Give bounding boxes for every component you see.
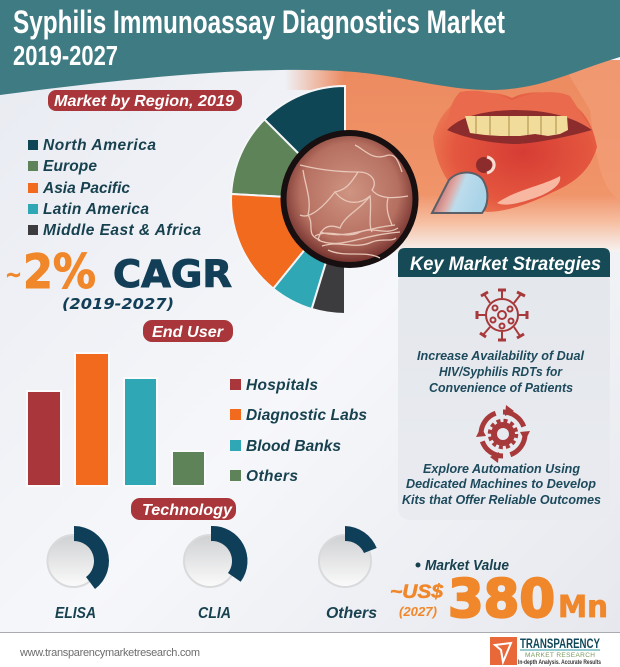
text: strategy two bbox=[402, 461, 601, 507]
text: strategy two: Explore Automation Using bbox=[423, 461, 580, 476]
panel: market by region bbox=[28, 86, 416, 314]
title: 2019-2027 bbox=[13, 40, 118, 71]
panel: end user bbox=[27, 320, 367, 486]
legend: regions: Middle East & Africa bbox=[43, 222, 201, 239]
legend: end user: Others bbox=[246, 468, 298, 485]
stat: market value bbox=[390, 557, 608, 630]
gauge: ELISA bbox=[48, 526, 109, 622]
heading: technology bbox=[131, 498, 236, 520]
stat: CAGR bbox=[5, 245, 232, 313]
legend: end user: Hospitals bbox=[246, 377, 318, 394]
stat: CAGR: CAGR bbox=[113, 253, 232, 296]
stat: market value: Market Value bbox=[425, 557, 509, 574]
text: strategy two: Dedicated Machines to Develop bbox=[406, 476, 596, 491]
heading: end user: End User bbox=[152, 324, 224, 341]
legend: regions: Europe bbox=[43, 158, 97, 175]
header band bbox=[0, 0, 620, 95]
stat: market value: Mn bbox=[558, 590, 608, 625]
gauge: CLIA: CLIA bbox=[198, 605, 231, 622]
gauge: others bbox=[319, 526, 377, 622]
icon: virus bbox=[477, 290, 527, 340]
legend: regions: Latin America bbox=[43, 201, 149, 218]
gauge: ELISA: ELISA bbox=[55, 605, 96, 622]
text: strategy one bbox=[417, 348, 584, 395]
legend: end user: Diagnostic Labs bbox=[246, 407, 367, 424]
icon: gear with cycle arrows bbox=[476, 405, 530, 463]
text: strategy two: Kits that Offer Reliable Outcomes bbox=[402, 492, 601, 507]
chart: regional donut bbox=[231, 86, 345, 314]
stat: market value: 380 bbox=[448, 569, 555, 630]
legend: regions: Asia Pacific bbox=[42, 180, 130, 197]
stat: market value: ~US$ bbox=[390, 582, 443, 603]
stat: CAGR: 2% bbox=[23, 245, 96, 300]
stat: CAGR: ~ bbox=[5, 263, 22, 288]
legend: end user: Blood Banks bbox=[246, 438, 341, 455]
heading: key market strategies bbox=[398, 248, 610, 277]
stat: market value: (2027) bbox=[399, 605, 437, 619]
text: strategy one: HIV/Syphilis RDTs for bbox=[439, 364, 563, 379]
legend: end user bbox=[230, 377, 367, 485]
bar chart: end user bbox=[27, 353, 205, 486]
illustration: mouth with syphilis ulcer bbox=[285, 60, 620, 252]
logo: Transparency Market Research bbox=[490, 636, 602, 666]
text: strategy one: Increase Availability of Dual bbox=[417, 348, 584, 363]
logo: Transparency Market Research: MARKET RESEARCH bbox=[525, 652, 595, 659]
gauge: others: Others bbox=[326, 605, 377, 622]
legend: regions bbox=[28, 137, 201, 239]
panel: technology bbox=[48, 498, 377, 622]
heading: market by region: Market by Region, 2019 bbox=[54, 93, 234, 110]
text: website url: www.transparencymarketresearch.com bbox=[19, 647, 200, 659]
logo: Transparency Market Research: In-depth Analysis. Accurate Results bbox=[518, 660, 602, 666]
heading: technology: Technology bbox=[142, 502, 233, 519]
title bbox=[13, 4, 505, 71]
gauge: CLIA bbox=[184, 526, 248, 622]
legend: regions: North America bbox=[43, 137, 156, 154]
text: strategy one: Convenience of Patients bbox=[429, 380, 573, 395]
stat: CAGR: (2019-2027) bbox=[62, 295, 174, 313]
footer band bbox=[0, 632, 620, 667]
heading: key market strategies: Key Market Strategies bbox=[410, 254, 601, 275]
image: retina with blood vessels bbox=[284, 133, 416, 265]
heading: end user bbox=[143, 320, 233, 342]
panel: key market strategies bbox=[398, 248, 610, 520]
